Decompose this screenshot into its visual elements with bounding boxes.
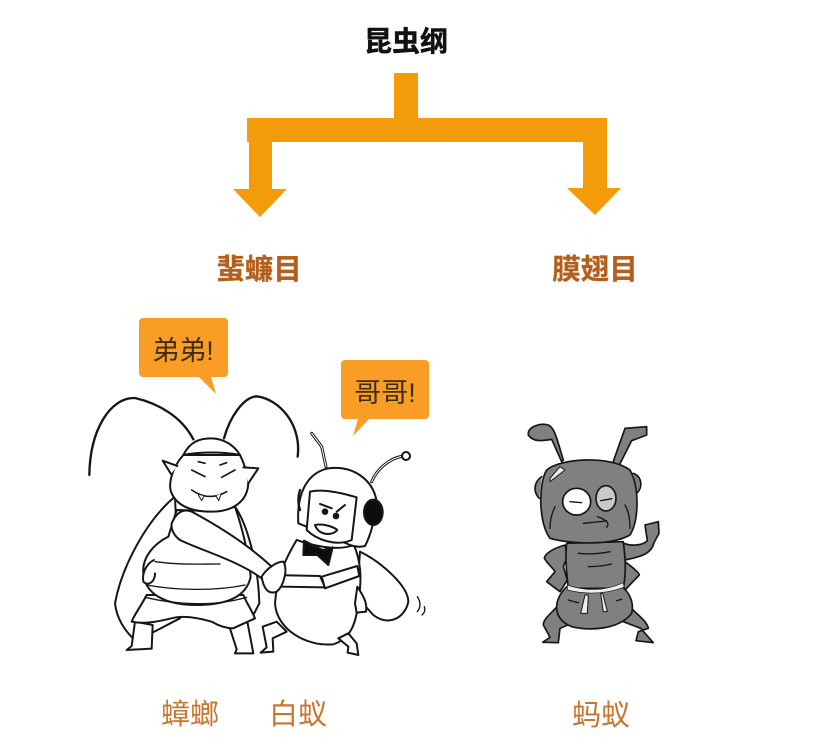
illustration: cockroach bbox=[89, 396, 298, 653]
label: 蟑螂: 蟑螂 bbox=[161, 698, 219, 731]
illustration: ant bbox=[528, 424, 659, 643]
label: 蚂蚁: 蚂蚁 bbox=[572, 699, 630, 732]
heading: 蜚蠊目: 蜚蠊目 bbox=[216, 254, 302, 286]
illustration: termite bbox=[261, 433, 425, 655]
callout: 弟弟: 弟弟! bbox=[152, 336, 214, 366]
heading: 膜翅目: 膜翅目 bbox=[552, 254, 638, 286]
title: 昆虫纲 bbox=[364, 26, 448, 57]
arrow: tree branching bbox=[233, 73, 621, 217]
callout: 弟弟 bbox=[139, 318, 228, 394]
callout: 哥哥: 哥哥! bbox=[354, 378, 416, 408]
callout: 哥哥 bbox=[341, 360, 429, 436]
label: 白蚁: 白蚁 bbox=[269, 698, 327, 731]
